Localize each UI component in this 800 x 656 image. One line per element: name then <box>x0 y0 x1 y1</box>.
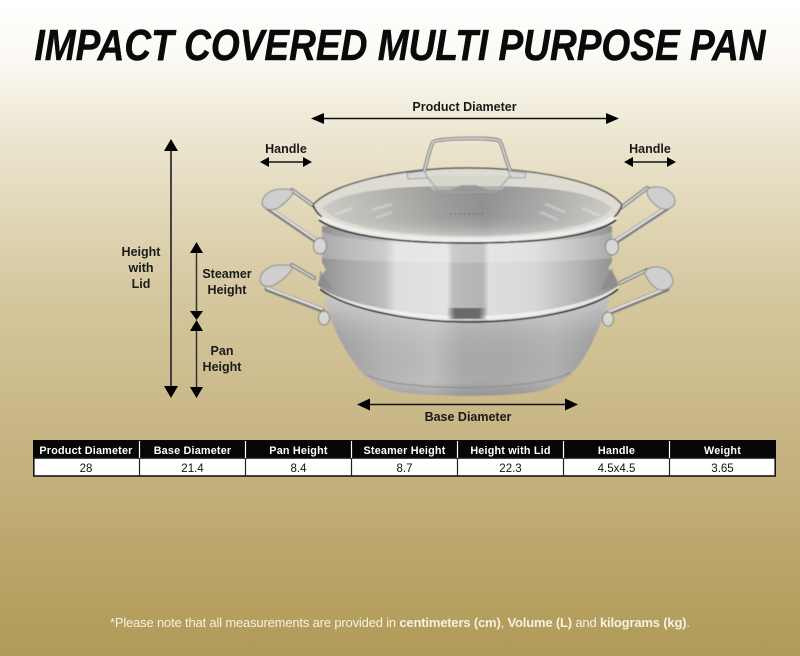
table values <box>80 463 734 475</box>
table values: 22.3 <box>499 463 522 475</box>
table column labels: Pan Height <box>269 445 328 457</box>
table values: 21.4 <box>181 463 204 475</box>
product photo: covered pan with steamer <box>260 138 675 396</box>
lid handle <box>407 138 526 179</box>
pan body <box>324 296 612 396</box>
steamer body <box>318 226 618 322</box>
dimension: height with lid <box>122 139 178 398</box>
dimension: left handle: Handle <box>265 142 307 156</box>
dimension: steamer height: Steamer <box>202 267 252 281</box>
table column labels: Handle <box>598 445 635 457</box>
handle plates <box>260 187 675 290</box>
table values: 8.7 <box>396 463 412 475</box>
handle bars <box>267 188 667 313</box>
table values: 3.65 <box>711 463 734 475</box>
dimension: pan height: Pan <box>211 344 233 358</box>
table body <box>34 458 775 476</box>
dimension: pan height <box>190 320 242 398</box>
specifications table <box>33 440 776 476</box>
dimension: steamer height: Height <box>208 283 247 297</box>
table header <box>33 440 776 458</box>
dimension: product diameter: Product Diameter <box>412 100 517 114</box>
table column labels: Product Diameter <box>39 445 133 457</box>
dimension: height with lid: with <box>128 261 154 275</box>
table values: 28 <box>80 463 92 475</box>
table values: 8.4 <box>290 463 307 475</box>
dimension: pan height: Height <box>203 360 242 374</box>
handle rivets <box>314 238 618 326</box>
steamer rim <box>319 216 616 240</box>
seam line <box>320 289 618 322</box>
dimension: product diameter <box>311 100 619 124</box>
dimension: left handle <box>260 142 312 167</box>
footnote: *Please note that all measurements are provided in centimeters (cm), Volume (L) and kilograms (kg). <box>110 615 690 630</box>
dimension: right handle: Handle <box>629 142 671 156</box>
lid glass and interior <box>313 167 622 240</box>
table column labels: Base Diameter <box>154 445 232 457</box>
table column labels: Weight <box>704 445 741 457</box>
dimension: right handle <box>624 142 676 167</box>
table column labels <box>39 445 741 457</box>
table column labels: Height with Lid <box>470 445 551 457</box>
dimension: height with lid: Lid <box>132 277 150 291</box>
dimension: base diameter: Base Diameter <box>425 410 512 424</box>
table values: 4.5x4.5 <box>598 463 635 475</box>
dimension: height with lid: Height <box>122 245 161 259</box>
dimension: base diameter <box>357 398 578 424</box>
table column labels: Steamer Height <box>364 445 446 457</box>
dimension: steamer height <box>190 242 252 320</box>
